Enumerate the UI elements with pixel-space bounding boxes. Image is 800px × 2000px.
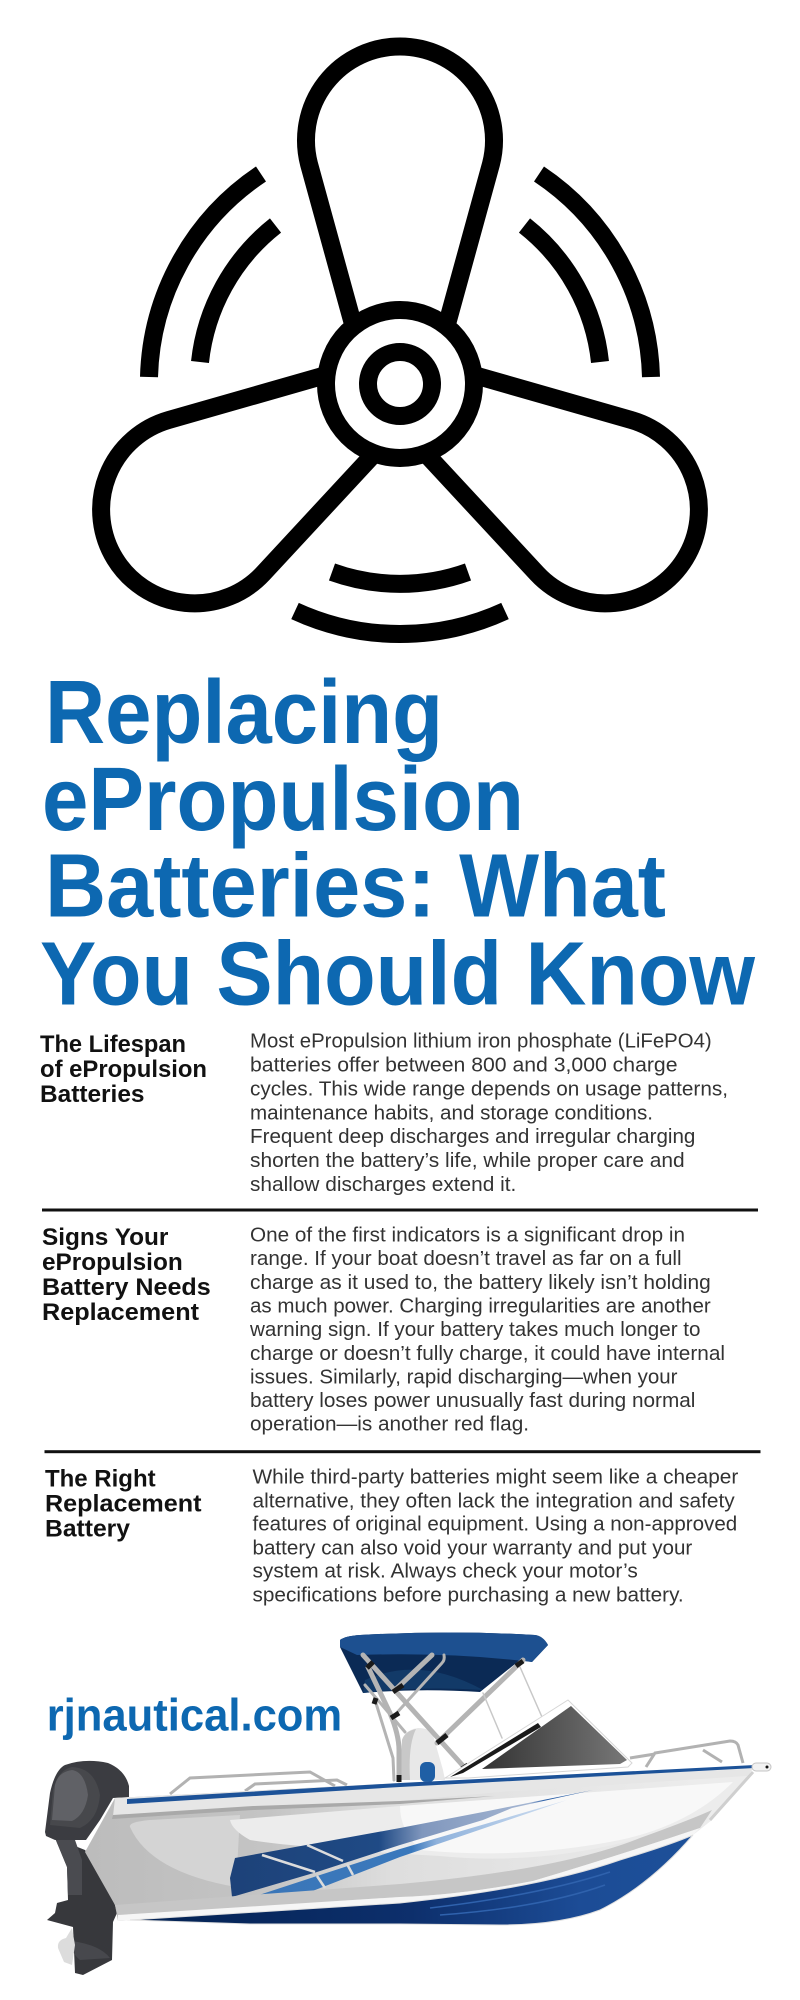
right blade <box>427 375 699 603</box>
text block: signs: One of the first indicators is a significant drop in <box>250 1224 685 1247</box>
hull lower band <box>115 1810 712 1915</box>
top blade <box>306 46 494 324</box>
title <box>40 663 756 1024</box>
hull decal <box>230 1790 593 1897</box>
bow nose <box>752 1763 771 1771</box>
text block: signs: operation—is another red flag. <box>250 1413 529 1436</box>
left blade <box>101 375 373 603</box>
text block: signs: charge as it used to, the battery likely isn’t holding <box>250 1271 711 1294</box>
panel: right replacement <box>45 1465 738 1607</box>
text block: signs <box>249 1224 725 1436</box>
title: Batteries: What <box>45 836 666 936</box>
heading: lifespan: of ePropulsion <box>40 1056 207 1083</box>
text block: right replacement: system at risk. Always check your motor’s <box>252 1560 638 1583</box>
text block: signs: range. If your boat doesn’t travel as far on a full <box>250 1247 682 1270</box>
heading: right replacement: The Right <box>45 1466 156 1493</box>
text block: lifespan <box>250 1030 728 1196</box>
boat windshield <box>445 1700 632 1778</box>
boat canopy <box>340 1632 548 1693</box>
heading: right replacement: Battery <box>45 1516 131 1543</box>
motion arcs right <box>524 174 651 377</box>
text block: signs: as much power. Charging irregularities are another <box>250 1295 711 1318</box>
text block: lifespan: Frequent deep discharges and irregular charging <box>250 1125 695 1148</box>
motor lower leg <box>47 1838 117 1975</box>
boat bow rails <box>630 1741 743 1767</box>
text block: lifespan: shallow discharges extend it. <box>250 1173 516 1196</box>
title: Replacing <box>45 663 443 763</box>
heading: signs: Battery Needs <box>42 1274 211 1301</box>
text block: right replacement: alternative, they often lack the integration and safety <box>252 1489 735 1512</box>
heading: lifespan <box>40 1031 207 1108</box>
bow pole <box>710 1772 753 1820</box>
title: ePropulsion <box>42 750 524 850</box>
boat stern rails <box>170 1772 347 1794</box>
text block: lifespan: maintenance habits, and storage conditions. <box>250 1101 653 1124</box>
text block: right replacement: While third-party batteries might seem like a cheaper <box>252 1465 738 1488</box>
hull blue underside <box>130 1835 693 1925</box>
propeller hub inner ring <box>368 352 432 416</box>
heading: lifespan: Batteries <box>40 1081 144 1108</box>
motor propeller <box>58 1928 75 1965</box>
hull shaded region <box>130 1815 240 1887</box>
text block: signs: warning sign. If your battery takes much longer to <box>249 1318 700 1341</box>
text block: signs: battery loses power unusually fast during normal <box>250 1389 695 1412</box>
heading: signs: ePropulsion <box>42 1249 183 1276</box>
text block: lifespan: shorten the battery’s life, while proper care and <box>250 1149 685 1172</box>
hull light region <box>230 1783 733 1859</box>
propeller hub outer ring <box>326 310 474 458</box>
icon: propeller <box>101 46 699 634</box>
text block: signs: charge or doesn’t fully charge, it could have internal <box>250 1342 725 1365</box>
motion arcs bottom <box>295 572 505 634</box>
boat frame bars <box>363 1655 542 1782</box>
text block: right replacement: specifications before purchasing a new battery. <box>252 1584 684 1607</box>
motor cowling <box>45 1761 129 1840</box>
hull rail stripe <box>127 1765 755 1804</box>
boat seat <box>400 1728 445 1782</box>
panel: signs <box>42 1224 725 1436</box>
motor torpedo <box>72 1941 110 1960</box>
text block: lifespan: Most ePropulsion lithium iron phosphate (LiFePO4) <box>250 1030 712 1052</box>
boat hull <box>85 1763 771 1925</box>
heading: signs <box>42 1224 211 1326</box>
hull top band <box>113 1769 753 1816</box>
illustration: boat <box>45 1632 771 1975</box>
text block: right replacement <box>252 1465 738 1607</box>
text block: lifespan: batteries offer between 800 and 3,000 charge <box>250 1053 678 1076</box>
heading: signs: Replacement <box>42 1299 199 1326</box>
text block: signs: issues. Similarly, rapid discharging—when your <box>250 1365 678 1388</box>
heading: right replacement <box>45 1466 202 1543</box>
outboard motor <box>45 1761 129 1975</box>
motion arcs left <box>149 174 276 377</box>
heading: lifespan: The Lifespan <box>40 1031 186 1058</box>
text block: right replacement: battery can also void your warranty and put your <box>252 1536 692 1559</box>
heading: signs: Signs Your <box>42 1224 168 1251</box>
heading: right replacement: Replacement <box>45 1491 202 1518</box>
text block: right replacement: features of original equipment. Using a non-approved <box>252 1513 737 1536</box>
panel: lifespan <box>40 1030 728 1196</box>
website url: rjnautical.com <box>47 1690 342 1741</box>
text block: lifespan: cycles. This wide range depends on usage patterns, <box>250 1077 728 1100</box>
title: You Should Know <box>40 924 756 1024</box>
